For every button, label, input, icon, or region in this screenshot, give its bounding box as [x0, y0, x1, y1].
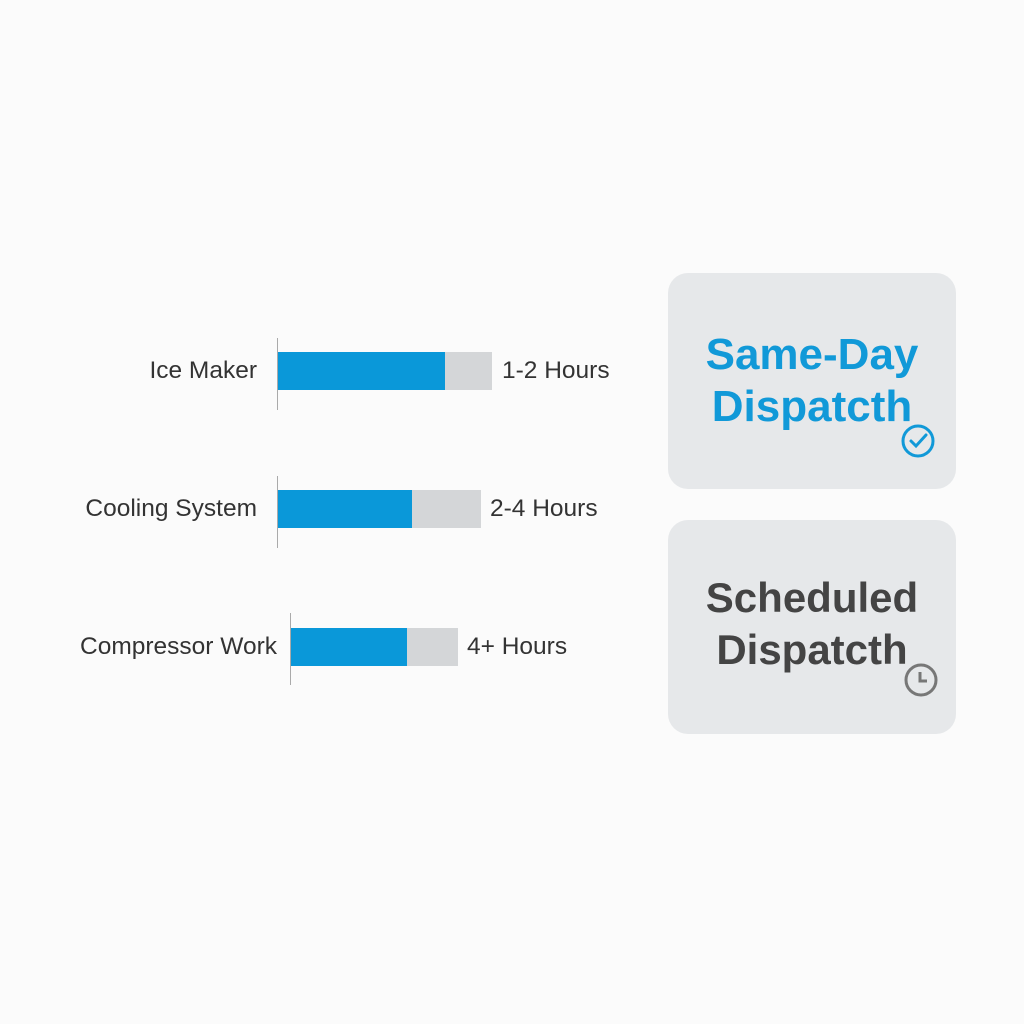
row: Compressor Work — [80, 613, 567, 685]
icon: clock — [904, 664, 938, 696]
row: Ice Maker: 1-2 Hours — [502, 357, 610, 384]
icon: check circle — [902, 424, 934, 458]
row: Ice Maker: Ice Maker — [149, 357, 257, 384]
row: Compressor Work: 4+ Hours — [467, 633, 567, 660]
panel: same-day dispatch — [668, 273, 956, 489]
heading: Same-Day Dispatcth: Same-Day — [706, 330, 918, 379]
panel: scheduled dispatch — [668, 520, 956, 734]
heading: Same-Day Dispatcth: Dispatcth — [712, 382, 912, 431]
bar chart — [80, 338, 610, 685]
row: Compressor Work: Compressor Work — [80, 633, 277, 660]
row: Ice Maker — [149, 338, 610, 410]
row: Cooling System: 2-4 Hours — [490, 495, 598, 522]
heading: Scheduled Dispatcth — [706, 574, 918, 673]
heading: Scheduled Dispatcth: Dispatcth — [716, 626, 908, 673]
row: Cooling System — [85, 476, 598, 548]
heading: Same-Day Dispatcth — [706, 330, 918, 431]
row: Cooling System: Cooling System — [85, 495, 257, 522]
heading: Scheduled Dispatcth: Scheduled — [706, 574, 918, 621]
